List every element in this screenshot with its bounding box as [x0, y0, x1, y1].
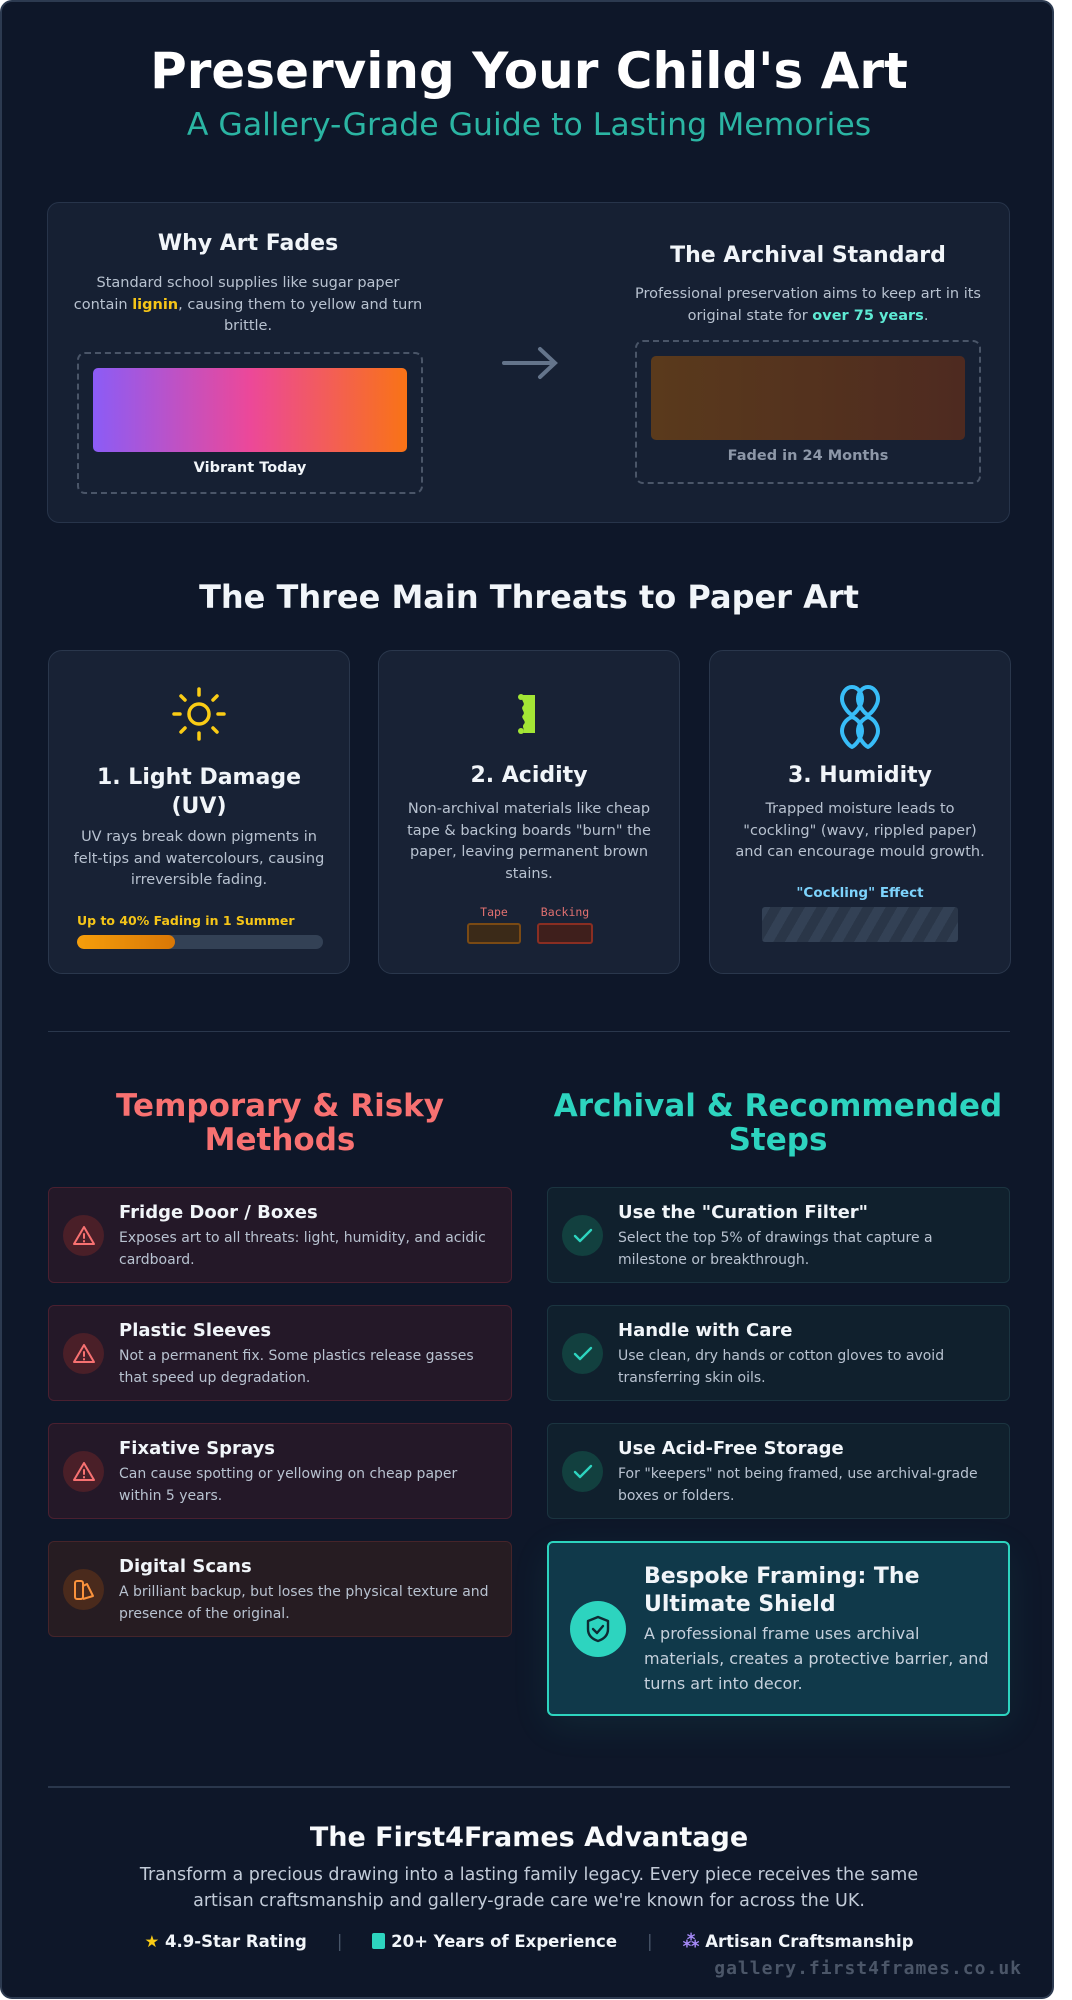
watermark: gallery.first4frames.co.uk — [714, 1958, 1022, 1979]
card: light damage — [48, 650, 350, 974]
swatch: vibrant — [77, 352, 423, 494]
text: 75 years: Professional preservation aims to keep art in its original state for over 75 years. — [635, 286, 981, 324]
item: fixative sprays: Can cause spotting or yellowing on cheap paper within 5 years. — [119, 1466, 457, 1504]
item: fridge door: Fridge Door / Boxes — [119, 1202, 318, 1223]
heading: advantage: The First4Frames Advantage — [310, 1822, 748, 1853]
stat: years: 20+ Years of Experience — [391, 1932, 617, 1951]
title: 3. Humidity — [788, 763, 932, 788]
card: humidity — [709, 650, 1011, 974]
arrow — [502, 346, 558, 380]
heading: archival & recommended: Steps — [729, 1122, 827, 1158]
heading: why art fades: Why Art Fades — [158, 231, 338, 256]
item: acid-free storage: For "keepers" not being framed, use archival-grade boxes or folders. — [618, 1466, 978, 1504]
cockling effect — [762, 885, 958, 942]
text: UV rays break down pigments in felt-tips and watercolours, causing irreversible fading. — [74, 829, 324, 888]
item: fridge door — [48, 1187, 512, 1283]
swatch: vibrant: Vibrant Today — [194, 460, 306, 476]
title: 1. Light Damage — [97, 765, 301, 790]
text: A professional frame uses archival materials, creates a protective barrier, and turns art into decor. — [644, 1624, 989, 1693]
stats row — [144, 1932, 914, 1951]
subtitle: A Gallery-Grade Guide to Lasting Memories — [187, 107, 871, 143]
title: 2. Acidity — [470, 763, 588, 788]
heading: temporary & risky: Methods — [205, 1122, 355, 1158]
item: curation filter: Select the top 5% of drawings that capture a milestone or breakthrough. — [618, 1230, 933, 1268]
heading: archival & recommended: Archival & Recommended — [554, 1088, 1002, 1124]
heading: three threats: The Three Main Threats to Paper Art — [199, 578, 859, 616]
item: fixative sprays — [48, 1423, 512, 1519]
heading: archival & recommended — [554, 1088, 1002, 1158]
swatches: tape and backing: Backing — [541, 905, 589, 919]
panel: why art fades comparison — [47, 202, 1010, 523]
text: Trapped moisture leads to "cockling" (wavy, rippled paper) and can encourage mould growth. — [735, 801, 985, 860]
title — [97, 765, 301, 819]
item: digital scans — [48, 1541, 512, 1637]
progress bar: 40% fading — [77, 913, 323, 949]
item: digital scans: A brilliant backup, but loses the physical texture and presence of the original. — [119, 1584, 489, 1622]
title: Preserving Your Child's Art — [150, 42, 908, 100]
item: curation filter: Use the "Curation Filter" — [618, 1202, 868, 1223]
item: acid-free storage — [547, 1423, 1010, 1519]
text: lignin: Standard school supplies like sugar paper contain lignin, causing them to yellow and turn brittle. — [74, 275, 422, 334]
swatches: tape and backing — [467, 905, 593, 944]
item: plastic sleeves: Plastic Sleeves — [119, 1320, 271, 1341]
item: handle with care — [547, 1305, 1010, 1401]
icon: shield — [570, 1601, 626, 1657]
progress bar: 40% fading: Up to 40% Fading in 1 Summer — [77, 913, 294, 928]
stat: craftsmanship: ⁂ Artisan Craftsmanship — [683, 1932, 914, 1951]
item: fixative sprays: Fixative Sprays — [119, 1438, 275, 1459]
title: (UV) — [172, 794, 226, 819]
item: digital scans: Digital Scans — [119, 1556, 252, 1577]
stats row: | — [337, 1932, 342, 1951]
item: fridge door: Exposes art to all threats: light, humidity, and acidic cardboard. — [119, 1230, 486, 1268]
heading: archival standard: The Archival Standard — [670, 243, 946, 268]
swatch: faded — [635, 340, 981, 484]
text: advantage: Transform a precious drawing into a lasting family legacy. Every piece receives the same artisan craftsmanship and gallery-grade care we're known for across the UK. — [140, 1865, 918, 1911]
swatches: tape and backing: Tape — [480, 905, 508, 919]
title: Bespoke Framing: The Ultimate Shield — [644, 1564, 920, 1617]
item: handle with care: Handle with Care — [618, 1320, 792, 1341]
item: plastic sleeves: Not a permanent fix. Some plastics release gasses that speed up degradation. — [119, 1348, 474, 1386]
card: acidity — [378, 650, 680, 974]
stats row: | — [647, 1932, 653, 1951]
stat: rating: ★ 4.9-Star Rating — [144, 1932, 307, 1951]
text: Non-archival materials like cheap tape & backing boards "burn" the paper, leaving permanent brown stains. — [407, 801, 651, 882]
item: handle with care: Use clean, dry hands or cotton gloves to avoid transferring skin oils. — [618, 1348, 944, 1386]
item: plastic sleeves — [48, 1305, 512, 1401]
item: curation filter — [547, 1187, 1010, 1283]
cockling effect: "Cockling" Effect — [796, 885, 924, 901]
heading: temporary & risky: Temporary & Risky — [116, 1088, 444, 1124]
swatch: faded: Faded in 24 Months — [728, 448, 888, 464]
item: bespoke framing highlight — [547, 1541, 1010, 1716]
icon: tape — [518, 694, 535, 734]
heading: temporary & risky — [116, 1088, 444, 1158]
icon: droplets — [840, 685, 880, 749]
icon: sun — [172, 687, 226, 741]
item: acid-free storage: Use Acid-Free Storage — [618, 1438, 844, 1459]
